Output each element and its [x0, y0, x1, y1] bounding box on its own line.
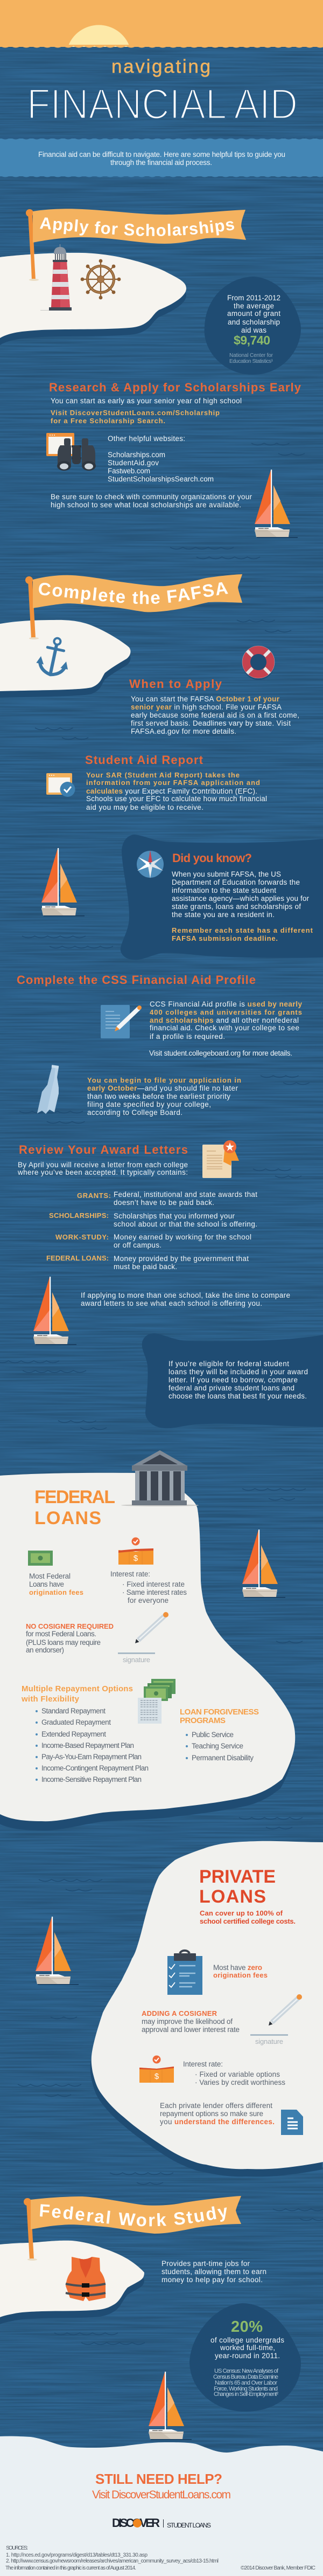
logo: Discover Student Loans: DISCOVER — [112, 2516, 160, 2530]
list: award letter contents — [46, 1190, 257, 1271]
icon: life vest — [66, 2257, 106, 2301]
text: student aid report: Schools use your EFC to calculate how much financial — [86, 795, 267, 803]
icon: sailboat — [36, 1917, 79, 1985]
panel: federal eligibility: federal and private student loans and — [168, 1384, 294, 1392]
text: origination fees: Loans have — [29, 1580, 64, 1588]
text: when to apply: early because some federal aid is on a first come, — [131, 711, 299, 719]
heading: award letters: Review Your Award Letters — [19, 1143, 188, 1156]
heading: repayment options: with Flexibility — [21, 1695, 80, 1704]
text: private interest rate — [183, 2060, 285, 2086]
text: federal interest rate: · Fixed interest rate — [122, 1580, 185, 1588]
icon: window with check — [46, 773, 75, 797]
panel: federal eligibility: If you’re eligible for federal student — [168, 1360, 289, 1368]
light water band — [0, 139, 323, 176]
callout: average aid stat: National Center for — [229, 353, 273, 359]
island: scholarships — [0, 253, 186, 345]
text: when to file CSS — [87, 1076, 241, 1117]
text: origination fees: origination fees — [29, 1588, 83, 1596]
icon: lighthouse — [40, 244, 72, 311]
text: compare letters — [81, 1291, 290, 1307]
decorative small waves — [0, 443, 323, 2344]
callout: 20 percent stat: of college undergrads — [210, 2336, 284, 2344]
sources: 2. http://www.census.gov/newsroom/releases/archives/american_community_survey_acs/cb13-15.html — [6, 2558, 219, 2564]
list: award letter contents: must be paid back. — [114, 1263, 177, 1271]
callout: average aid stat: Education Statistics¹ — [229, 359, 273, 364]
intro text: Financial aid can be difficult to navigate. Here are some helpful tips to guide you — [38, 150, 285, 159]
icon: life ring — [242, 646, 275, 680]
text: federal work study: Provides part-time jobs for — [162, 2260, 250, 2268]
list: award letter contents: school about or that the school is offering. — [114, 1220, 257, 1228]
list: loan forgiveness: Public Service — [192, 1731, 234, 1739]
logo: Discover Student Loans: STUDENT LOANS — [167, 2522, 211, 2529]
icon: document — [281, 2110, 303, 2135]
text: federal work study: money to help pay for school. — [162, 2276, 263, 2284]
callout: 20 percent stat: Force, Working Students and — [214, 2386, 278, 2392]
logo: Discover Student Loans — [112, 2516, 211, 2530]
heading: federal loans: LOANS — [34, 1508, 101, 1528]
icon: pencil and signature line — [118, 1612, 168, 1664]
call to action: STILL NEED HELP? — [95, 2471, 222, 2487]
text: adding a cosigner: may improve the likelihood of — [142, 2017, 233, 2026]
icon: pencil and signature line: signature — [123, 1656, 150, 1664]
icon: compass — [137, 850, 164, 878]
list: loan forgiveness: LOAN FORGIVENESS — [180, 1707, 259, 1717]
callout: 20 percent stat — [189, 2303, 301, 2412]
text: research and apply: Visit DiscoverStudentLoans.com/Scholarship — [51, 409, 220, 417]
text: award letters intro: where you’ve been accepted. It typically contains: — [17, 1168, 188, 1176]
text: student aid report: information from your FAFSA application and — [86, 779, 260, 787]
text: did you know: the state you are a resident in. — [172, 911, 275, 919]
call to action — [92, 2471, 231, 2501]
text: when to apply: first served basis. Deadlines vary by state. Visit — [131, 719, 291, 727]
text: other websites: high school to see what local scholarships are available. — [51, 501, 241, 509]
sources: ©2014 Discover Bank, Member FDIC — [241, 2565, 315, 2571]
list: award letter contents: Federal, institutional and state awards that — [114, 1190, 257, 1199]
text: research and apply: You can start as early as your senior year of high school — [51, 397, 242, 405]
list: award letter contents: Money earned by working for the school — [114, 1233, 251, 1241]
icon: pencil and signature line — [250, 1994, 302, 2045]
callout: 20 percent stat: worked full-time, — [220, 2344, 275, 2352]
text: understand the differences: Each private lender offers different — [160, 2102, 272, 2110]
text: when to file CSS: according to College Board. — [87, 1108, 182, 1117]
text: CSS profile: 400 colleges and universities for grants — [150, 1008, 302, 1016]
heading: research and apply: Research & Apply for Scholarships Early — [49, 381, 301, 394]
intro text — [38, 150, 285, 167]
text: did you know: Department of Education forwards the — [172, 878, 300, 886]
icon: money and statement — [138, 1679, 175, 1724]
island: private loans — [90, 1841, 323, 2176]
icon: sailboat — [255, 470, 298, 538]
icon: government building — [121, 1450, 199, 1506]
text: student aid report: aid you may be eligible to receive. — [86, 803, 203, 811]
list: award letter contents: WORK-STUDY: — [55, 1233, 109, 1241]
island: federal loans — [0, 1473, 295, 1830]
text: origination fees: Most Federal — [29, 1572, 71, 1580]
list: repayment plans: Graduated Repayment — [41, 1718, 111, 1726]
text: understand the differences — [160, 2102, 275, 2126]
icon: ship wheel — [81, 259, 121, 299]
text: research and apply — [51, 397, 242, 425]
list: repayment plans: Pay-As-You-Earn Repayment Plan — [41, 1753, 142, 1761]
sources: SOURCES: — [6, 2545, 28, 2551]
text: compare letters: If applying to more than one school, take the time to compare — [81, 1291, 290, 1299]
sources: 1. http://nces.ed.gov/programs/digest/d13/tables/dt13_331.30.asp — [6, 2552, 148, 2558]
text: student aid report — [86, 771, 267, 811]
text: other websites: Other helpful websites: — [108, 435, 185, 443]
text: award letters intro: By April you will receive a letter from each college — [18, 1161, 188, 1169]
callout: average aid stat — [205, 277, 301, 375]
heading: private loans — [199, 1866, 296, 1925]
icon: sailboat — [41, 848, 85, 917]
heading: when to apply: When to Apply — [129, 677, 222, 691]
flag: Apply for Scholarships — [26, 209, 246, 254]
text: other websites: Be sure sure to check with community organizations or your — [51, 493, 252, 501]
text: CSS profile: and scholarships and all other nonfederal — [150, 1016, 299, 1024]
list: repayment plans: Extended Repayment — [41, 1730, 106, 1738]
icon: pencil and signature line: signature — [255, 2037, 283, 2045]
list: loan forgiveness: Teaching Service — [192, 1742, 243, 1750]
icon: interest rate box — [118, 1538, 153, 1565]
callout: average aid stat: aid was — [241, 326, 266, 334]
title: FINANCIAL AID — [27, 80, 298, 128]
text: federal interest rate: · Same interest rates — [122, 1588, 187, 1596]
text: other websites: StudentAid.gov — [108, 459, 159, 467]
footer panel — [0, 2436, 323, 2576]
callout: 20 percent stat: US Census: New Analyses of — [214, 2368, 279, 2374]
list: repayment plans: Income-Sensitive Repayment Plan — [41, 1775, 142, 1783]
list: loan forgiveness: PROGRAMS — [180, 1716, 226, 1725]
text: no cosigner — [26, 1622, 114, 1654]
text: when to file CSS: filing date specified by your college, — [87, 1100, 211, 1108]
icon: sailboat — [149, 2372, 192, 2440]
text: research and apply: for a Free Scholarship Search. — [51, 417, 165, 425]
icon: anchor — [34, 635, 74, 678]
call to action: Visit DiscoverStudentLoans.com — [92, 2489, 231, 2501]
text: federal interest rate: Interest rate: — [110, 1570, 150, 1578]
island: federal work study — [0, 2241, 144, 2324]
list: loan forgiveness: Permanent Disability — [192, 1754, 254, 1762]
heading: federal loans — [34, 1487, 115, 1528]
text: private interest rate: Interest rate: — [183, 2060, 223, 2068]
callout: average aid stat: and scholarship — [228, 318, 280, 326]
text: no cosigner: NO COSIGNER REQUIRED — [26, 1622, 114, 1630]
callout: average aid stat: From 2011-2012 — [227, 294, 280, 302]
list: award letter contents: GRANTS: — [77, 1191, 111, 1200]
text: when to apply: You can start the FAFSA October 1 of your — [131, 695, 280, 703]
heading: private loans: Can cover up to 100% of — [200, 1909, 283, 1917]
list: repayment plans: Standard Repayment — [41, 1707, 106, 1715]
flag: Apply for Scholarships: Apply for Scholarships — [40, 217, 234, 236]
text: did you know: assistance agency—which applies you for — [172, 894, 309, 903]
text: when to file CSS: You can begin to file your application in — [87, 1076, 241, 1084]
callout: average aid stat: the average — [234, 302, 274, 310]
heading: repayment options — [21, 1684, 133, 1704]
icon: banknote — [28, 1551, 53, 1566]
list: award letter contents: Scholarships that you informed your — [114, 1212, 235, 1220]
text: did you know: FAFSA submission deadline. — [172, 934, 278, 942]
heading: student aid report: Student Aid Report — [85, 753, 203, 767]
text: CSS profile: CCS Financial Aid profile is used by nearly — [150, 1000, 302, 1008]
text: no cosigner: (PLUS loans may require — [26, 1638, 101, 1647]
icon: clipboard — [167, 1951, 202, 1995]
sky — [0, 0, 323, 47]
list: award letter contents: doesn’t have to be paid back. — [114, 1199, 214, 1207]
panel: federal eligibility: choose the loans that best fit your needs. — [168, 1392, 307, 1400]
title — [27, 56, 298, 128]
text: zero origination fees: Most have zero — [213, 1964, 262, 1972]
heading: federal loans: FEDERAL — [34, 1487, 115, 1507]
text: private interest rate: · Fixed or variable options — [195, 2070, 280, 2078]
callout: 20 percent stat: Census Bureau Data Examine — [213, 2374, 278, 2380]
text: when to file CSS: early October—and you should file no later — [87, 1084, 238, 1092]
text: federal interest rate — [110, 1570, 187, 1604]
intro text: through the financial aid process. — [110, 159, 212, 167]
callout: 20 percent stat: year-round in 2011. — [215, 2352, 280, 2360]
callout: 20 percent stat: 20% — [231, 2318, 263, 2336]
list: repayment plans: Income-Contingent Repayment Plan — [41, 1764, 149, 1772]
text: adding a cosigner: ADDING A COSIGNER — [142, 2009, 217, 2017]
panel: did you know — [121, 835, 323, 960]
text: zero origination fees: origination fees — [213, 1971, 268, 1979]
text: student aid report: Your SAR (Student Aid Report) takes the — [86, 771, 240, 779]
sun — [68, 25, 130, 47]
text: when to apply — [131, 695, 299, 735]
list: award letter contents: or off campus. — [114, 1241, 162, 1249]
text: understand the differences: you understand the differences. — [160, 2118, 275, 2126]
panel: federal eligibility: letter. If you need to borrow, compare — [168, 1376, 298, 1384]
text: when to file CSS: than two weeks before the earliest priority — [87, 1092, 230, 1100]
heading: did you know: Did you know? — [172, 851, 252, 865]
text: CSS profile: if a profile is required. — [150, 1032, 225, 1041]
text: private interest rate: · Varies by credit worthiness — [195, 2078, 285, 2086]
text: zero origination fees — [213, 1964, 268, 1979]
text: other websites: StudentScholarshipsSearch.com — [108, 475, 214, 483]
list: loan forgiveness — [180, 1707, 259, 1762]
panel: federal eligibility: loans they will be included in your award — [168, 1368, 308, 1376]
text: did you know — [172, 870, 313, 942]
text: other websites: Fastweb.com — [108, 467, 150, 475]
callout: average aid stat: $9,740 — [234, 333, 270, 347]
text: CSS profile — [149, 1000, 302, 1057]
heading: private loans: LOANS — [199, 1886, 266, 1907]
callout: average aid stat: amount of grant — [227, 309, 280, 318]
icon: interest rate box: $ — [134, 1554, 138, 1563]
icon: sailboat — [242, 1530, 285, 1598]
icon: message in a bottle — [37, 1065, 59, 1114]
icon: sailboat — [33, 1277, 76, 1345]
text: federal work study: students, allowing them to earn — [162, 2268, 266, 2276]
text: did you know: Remember each state has a different — [172, 926, 313, 934]
flag pole base — [29, 243, 39, 281]
heading: CSS profile: Complete the CSS Financial Aid Profile — [17, 973, 256, 987]
flag: Federal Work Study — [24, 2196, 241, 2261]
heading: private loans: school certified college costs. — [200, 1917, 296, 1925]
list: award letter contents: Money provided by the government that — [114, 1255, 249, 1263]
text: federal interest rate: for everyone — [128, 1596, 168, 1604]
sources — [5, 2545, 315, 2571]
island: FAFSA — [0, 620, 130, 698]
text: other websites: Scholarships.com — [108, 451, 165, 459]
heading: private loans: PRIVATE — [199, 1866, 276, 1887]
text: adding a cosigner: approval and lower interest rate — [142, 2026, 240, 2034]
text: other websites — [51, 435, 252, 509]
heading: repayment options: Multiple Repayment Options — [22, 1684, 133, 1693]
text: did you know: When you submit FAFSA, the US — [172, 870, 281, 878]
text: when to apply: FAFSA.ed.gov for more details. — [131, 727, 236, 735]
list: award letter contents: FEDERAL LOANS: — [46, 1254, 109, 1262]
text: award letters intro — [17, 1161, 188, 1176]
flag: Federal Work Study: Federal Work Study — [40, 2204, 227, 2227]
flag: Complete the FAFSA — [25, 574, 242, 639]
title: navigating — [111, 56, 210, 77]
panel: federal eligibility — [142, 1333, 323, 1428]
text: federal work study — [162, 2260, 266, 2284]
list: award letter contents: SCHOLARSHIPS: — [49, 1211, 109, 1220]
text: no cosigner: an endorser) — [26, 1646, 64, 1654]
sources: The information contained in this graphic is current as of August 2014. — [5, 2565, 136, 2571]
icon: document and pencil — [101, 1005, 142, 1038]
text: origination fees — [29, 1572, 83, 1596]
text: when to apply: senior year in high school. File your FAFSA — [131, 703, 282, 711]
text: understand the differences: repayment options so make sure — [160, 2110, 263, 2118]
callout: 20 percent stat: Nation’s 65 and Over Labor — [215, 2380, 277, 2386]
icon: interest rate box — [139, 2055, 174, 2083]
flag: Complete the FAFSA: Complete the FAFSA — [39, 582, 228, 604]
text: did you know: state grants, loans and scholarships of — [172, 903, 301, 911]
icon: award letter — [202, 1140, 239, 1178]
text: student aid report: calculates your Expect Family Contribution (EFC). — [86, 787, 257, 795]
callout: 20 percent stat: Changes in Self-Employment² — [214, 2391, 278, 2398]
list: repayment plans: Income-Based Repayment Plan — [41, 1741, 134, 1750]
text: did you know: information to the state student — [172, 886, 276, 894]
text: compare letters: award letters to see what each school is offering you. — [81, 1299, 262, 1307]
text: CSS profile: Visit student.collegeboard.org for more details. — [149, 1049, 292, 1057]
icon: interest rate box: $ — [155, 2072, 159, 2081]
text: adding a cosigner — [142, 2009, 240, 2034]
icon: browser and binoculars — [46, 433, 96, 471]
text: no cosigner: for most Federal Loans. — [26, 1630, 96, 1638]
list: repayment plans — [36, 1707, 149, 1783]
text: CSS profile: financial aid. Check with your college to see — [150, 1024, 299, 1032]
